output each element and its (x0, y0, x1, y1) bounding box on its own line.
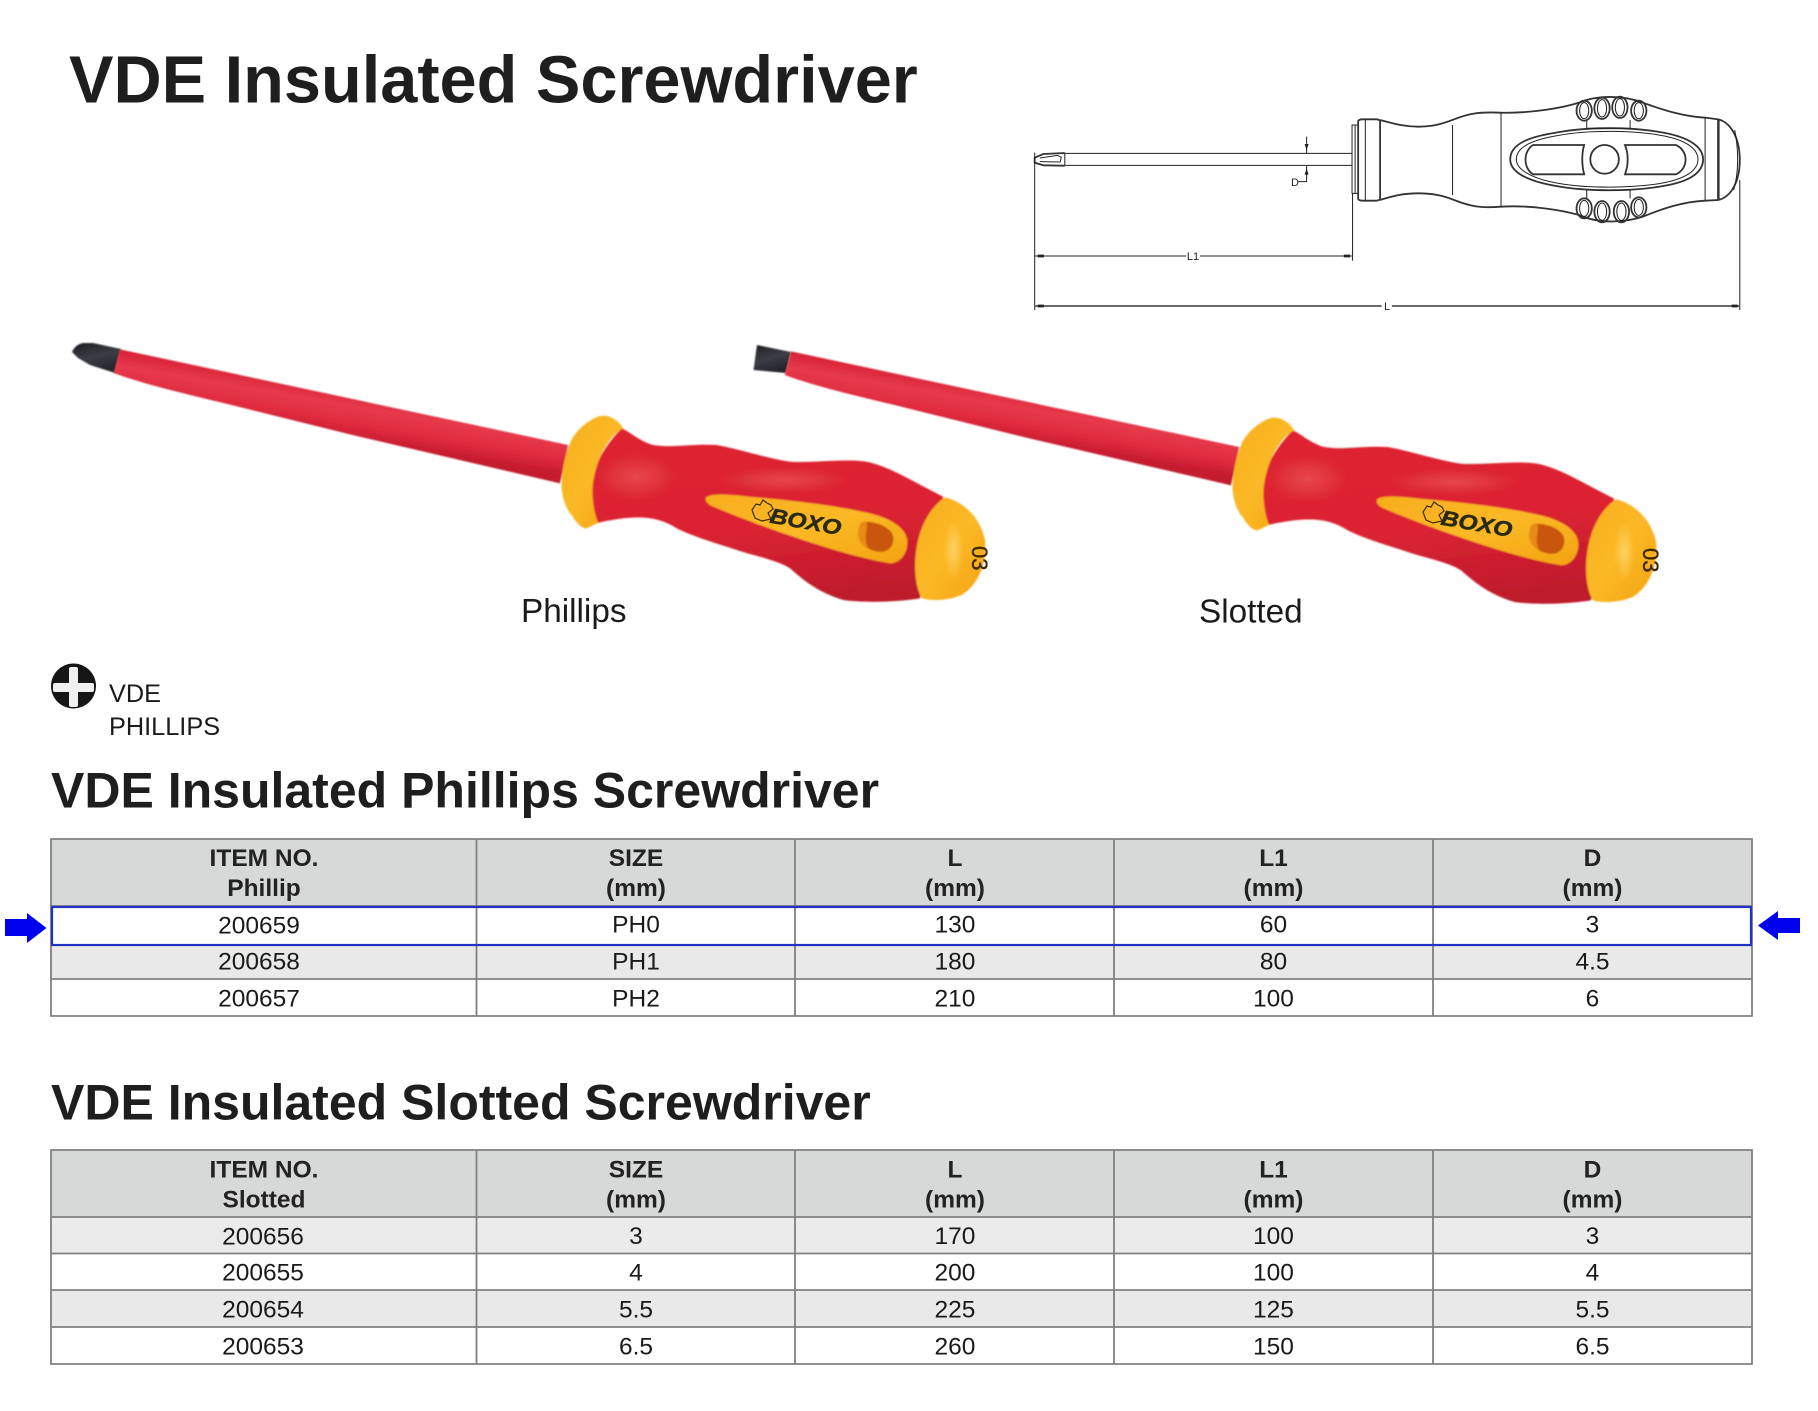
brand name: BOXO (768, 505, 843, 540)
header row: (mm) (1244, 1186, 1303, 1214)
row 200655 (222, 1260, 1599, 1286)
slotted tip (754, 345, 791, 373)
header row: L (948, 1156, 963, 1184)
caption: Phillips: Phillips (521, 593, 626, 630)
table: phillips (51, 839, 1752, 1016)
row 200658: PH1 (612, 948, 660, 976)
phillips tip (72, 343, 121, 373)
row 200655: 200655 (222, 1260, 304, 1286)
dimension label L1: L1 (1187, 251, 1199, 263)
dimension label L: L (1384, 301, 1390, 313)
row 200659 (218, 912, 1599, 940)
row 200657: 100 (1253, 986, 1294, 1012)
header row (210, 1156, 1622, 1214)
header row: D (1584, 845, 1601, 872)
logo mark (752, 500, 773, 521)
row 200658 (218, 948, 1610, 976)
heading: phillips table: VDE Insulated Phillips Screwdriver (51, 762, 879, 818)
photo: slotted screwdriver (754, 345, 1663, 604)
row 200657: 210 (935, 986, 975, 1012)
row 200653 (222, 1334, 1610, 1360)
row 200659: PH0 (612, 912, 660, 938)
header row (210, 845, 1622, 902)
logo mark (1423, 502, 1444, 523)
row highlight (52, 907, 1751, 945)
header row: Phillip (227, 875, 301, 902)
row 200657: 6 (1586, 986, 1599, 1012)
header row: (mm) (925, 1186, 985, 1214)
brand name: BOXO (1439, 507, 1514, 542)
row 200656: 3 (629, 1223, 643, 1250)
row 200655: 4 (1586, 1260, 1599, 1286)
header row: L (948, 845, 963, 872)
icon label: PHILLIPS (109, 713, 220, 741)
caption: Slotted: Slotted (1199, 594, 1303, 630)
row 200659: 130 (935, 912, 975, 938)
arrow: left (5, 913, 46, 943)
row 200654: 200654 (222, 1296, 304, 1324)
row 200657: 200657 (218, 986, 300, 1012)
row 200653: 150 (1253, 1334, 1294, 1360)
row 200656: 100 (1253, 1223, 1294, 1250)
row 200653: 6.5 (1575, 1334, 1610, 1360)
header row: ITEM NO. (210, 1156, 318, 1184)
technical line drawing with dimensions (1035, 97, 1740, 313)
arrow: right (1758, 911, 1800, 940)
row 200659: 200659 (218, 912, 300, 940)
row 200655: 100 (1253, 1260, 1294, 1286)
row 200654 (222, 1296, 1610, 1324)
header row: ITEM NO. (210, 845, 318, 872)
dimension label D: D (1291, 177, 1299, 189)
row 200656 (222, 1223, 1599, 1250)
end cap marking: 03 (1638, 548, 1663, 572)
icon label: VDE (109, 680, 161, 708)
header row: (mm) (606, 875, 666, 902)
row 200657: PH2 (612, 986, 660, 1012)
row 200658: 80 (1260, 948, 1287, 976)
row 200653: 6.5 (619, 1334, 653, 1360)
header row: (mm) (606, 1186, 666, 1214)
row 200653: 260 (935, 1334, 975, 1360)
header row: (mm) (1563, 1186, 1622, 1214)
row 200654: 5.5 (1575, 1296, 1610, 1324)
header row: Slotted (222, 1186, 306, 1214)
row 200658: 4.5 (1575, 948, 1610, 976)
row 200656: 170 (935, 1223, 975, 1250)
heading: slotted table: VDE Insulated Slotted Screwdriver (51, 1074, 871, 1130)
header row: D (1584, 1156, 1601, 1184)
header row: SIZE (609, 845, 663, 872)
header row: (mm) (1244, 875, 1303, 902)
row 200655: 200 (935, 1260, 975, 1286)
header row: (mm) (1563, 875, 1622, 902)
title: VDE Insulated Screwdriver (69, 44, 918, 118)
row 200654: 5.5 (619, 1296, 653, 1324)
header row: SIZE (609, 1156, 663, 1184)
row 200656: 200656 (222, 1224, 304, 1250)
icon: phillips cross (51, 664, 96, 708)
row 200653: 200653 (222, 1334, 304, 1360)
photo: phillips screwdriver (72, 343, 992, 602)
row 200658: 200658 (218, 948, 300, 976)
row 200654: 125 (1253, 1296, 1294, 1324)
end cap marking: 03 (967, 546, 992, 570)
row 200657 (218, 986, 1599, 1012)
header row: (mm) (925, 875, 985, 902)
row 200656: 3 (1586, 1223, 1599, 1250)
row 200659: 60 (1260, 912, 1287, 938)
row 200659: 3 (1586, 912, 1599, 938)
header row: L1 (1259, 1156, 1288, 1184)
header row: L1 (1259, 845, 1288, 872)
table: slotted (51, 1150, 1752, 1364)
row 200658: 180 (935, 948, 975, 976)
row 200654: 225 (935, 1296, 975, 1324)
row 200655: 4 (629, 1260, 643, 1286)
